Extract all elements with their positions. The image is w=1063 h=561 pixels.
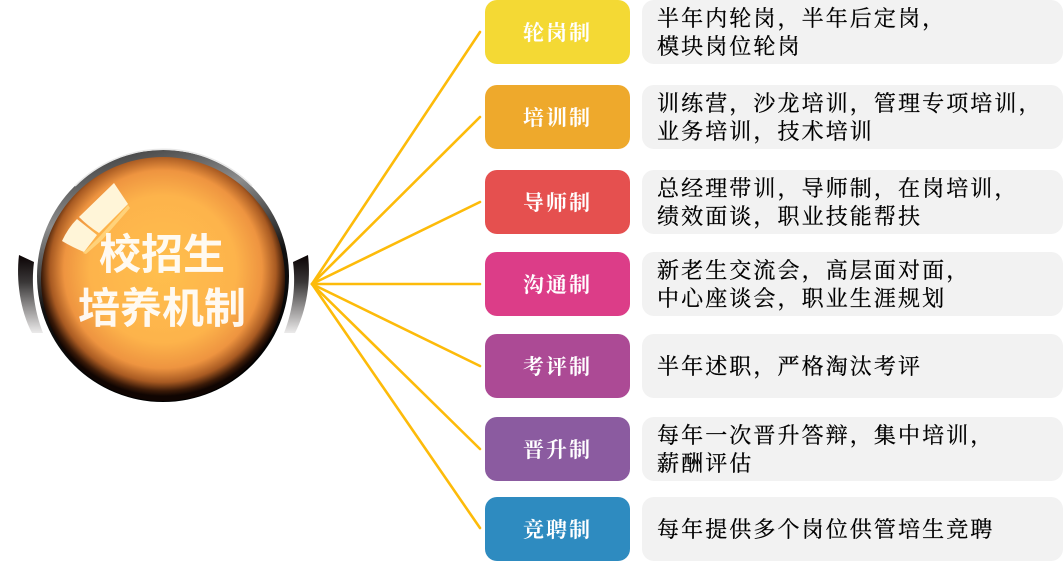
row 6 label: 晋升制 xyxy=(523,438,592,462)
left bracket xyxy=(18,255,43,333)
outer rim xyxy=(37,150,289,402)
row 3 description: 总经理带训，导师制，在岗培训， xyxy=(657,176,1019,201)
row 4 description: 中心座谈会，职业生涯规划 xyxy=(657,286,946,311)
row 1 description: 半年内轮岗，半年后定岗， xyxy=(657,6,946,31)
glass highlight xyxy=(62,183,130,254)
row 1 description xyxy=(642,0,1063,64)
row 7 label xyxy=(485,497,630,561)
right bracket xyxy=(284,255,309,333)
row 7 label: 竞聘制 xyxy=(523,518,592,542)
row 4 description xyxy=(642,252,1063,316)
row 1 label: 轮岗制 xyxy=(523,21,592,45)
row 3 label xyxy=(485,170,630,234)
row 2 label xyxy=(485,85,630,149)
row 6 description: 薪酬评估 xyxy=(657,451,753,476)
row 2 label: 培训制 xyxy=(523,106,592,130)
central badge xyxy=(18,148,309,402)
row 6 description: 每年一次晋升答辩，集中培训， xyxy=(657,423,994,448)
row 6 label xyxy=(485,417,630,481)
row 2 description: 训练营，沙龙培训，管理专项培训， xyxy=(657,91,1043,116)
row 1 description: 模块岗位轮岗 xyxy=(657,34,802,59)
row 2 description: 业务培训，技术培训 xyxy=(657,119,874,144)
row 7 description xyxy=(642,497,1063,561)
row 5 description xyxy=(642,334,1063,398)
row 1 label xyxy=(485,0,630,64)
row 3 description: 绩效面谈，职业技能帮扶 xyxy=(657,204,922,229)
row 4 label xyxy=(485,252,630,316)
row 2 description xyxy=(642,85,1063,149)
orange sphere xyxy=(41,157,285,401)
row 3 description xyxy=(642,170,1063,234)
row 5 label xyxy=(485,334,630,398)
row 5 label: 考评制 xyxy=(523,355,592,379)
row 4 description: 新老生交流会，高层面对面， xyxy=(657,258,970,283)
badge title: 校招生 xyxy=(99,231,225,278)
row 4 label: 沟通制 xyxy=(523,273,592,297)
row 6 description xyxy=(642,417,1063,481)
row 7 description: 每年提供多个岗位供管培生竞聘 xyxy=(657,517,994,542)
central badge: 培养机制 xyxy=(78,285,246,332)
row 5 description: 半年述职，严格淘汰考评 xyxy=(657,354,922,379)
row 3 label: 导师制 xyxy=(523,191,592,215)
